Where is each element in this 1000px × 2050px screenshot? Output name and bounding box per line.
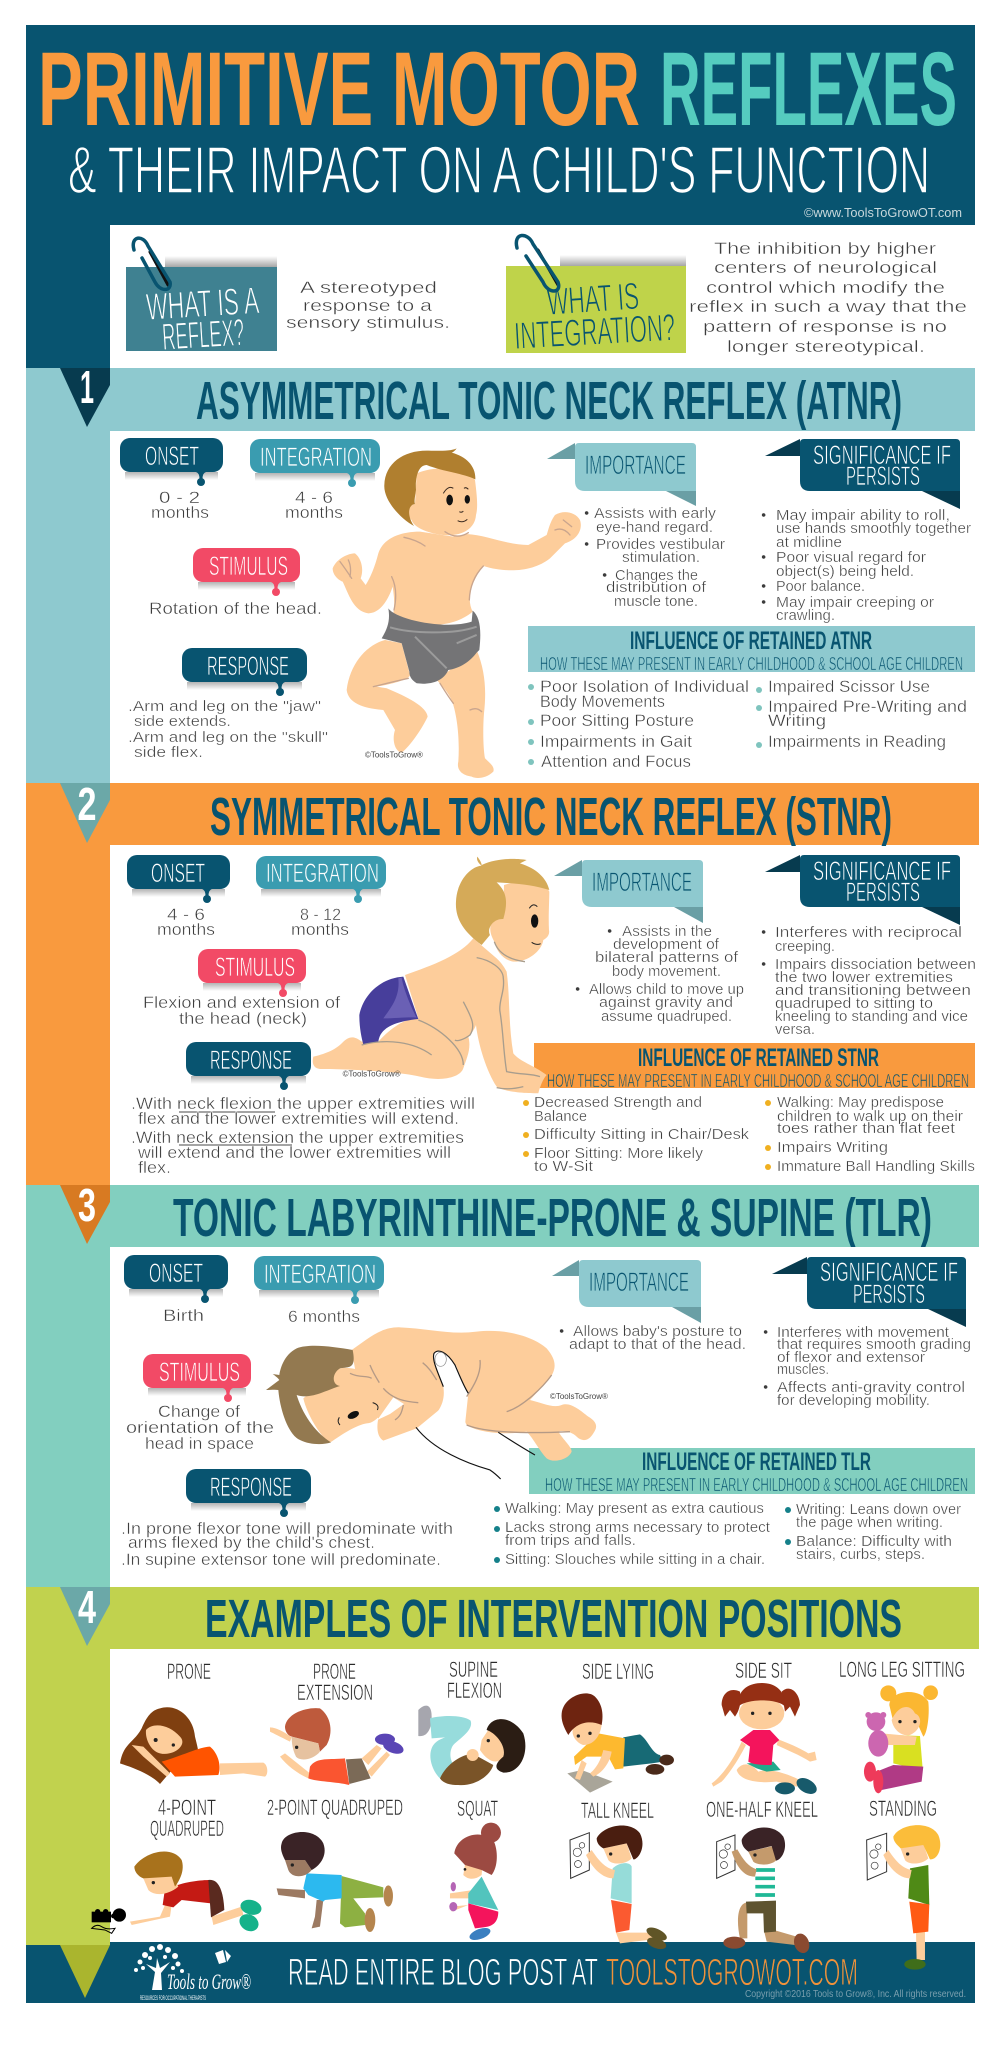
STNR influence list: children to walk up on their xyxy=(777,1108,963,1125)
definition: reflex: sensory stimulus. xyxy=(286,313,450,332)
ATNR influence list xyxy=(528,677,967,771)
position labels: TALL KNEEL xyxy=(581,1798,654,1823)
STNR response text: will extend and the lower extremities will xyxy=(137,1143,451,1162)
TLR stimulus tag: STIMULUS xyxy=(159,1357,240,1387)
STNR onset value: months xyxy=(157,920,215,939)
TLR stimulus tag xyxy=(143,1354,251,1402)
ATNR importance list: Changes the xyxy=(615,567,698,584)
STNR onset tag: ONSET xyxy=(151,858,205,888)
TLR importance ribbon xyxy=(552,1260,701,1323)
ATNR importance list: • xyxy=(584,505,589,522)
TLR influence list: from trips and falls. xyxy=(505,1532,636,1549)
STNR significance ribbon: PERSISTS xyxy=(846,877,920,907)
ATNR importance list: eye-hand regard. xyxy=(596,519,713,536)
ATNR response tag xyxy=(182,648,307,696)
STNR integration tag xyxy=(256,856,386,903)
STNR influence list: Floor Sitting: More likely xyxy=(534,1145,704,1162)
ATNR significance list: use hands smoothly together xyxy=(776,520,971,537)
STNR influence list: Decreased Strength and xyxy=(534,1094,702,1111)
STNR significance ribbon xyxy=(765,855,960,925)
ATNR significance list: May impair ability to roll, xyxy=(776,507,950,524)
ATNR importance list xyxy=(584,505,725,610)
note: what is a reflex: WHAT IS A xyxy=(145,280,261,329)
definition: integration xyxy=(689,239,967,356)
TLR significance list: of flexor and extensor xyxy=(777,1349,925,1366)
TLR significance list: Affects anti-gravity control xyxy=(777,1379,965,1396)
TLR influence list xyxy=(494,1500,961,1568)
section 3 band xyxy=(26,1179,979,1587)
STNR significance list xyxy=(761,924,976,1038)
position labels: EXTENSION xyxy=(297,1680,373,1705)
position labels: SQUAT xyxy=(457,1796,498,1821)
ATNR integration value: 4 - 6 xyxy=(295,488,333,507)
definition: reflex xyxy=(286,278,450,332)
STNR response tag xyxy=(186,1042,311,1090)
illustration: ATNR baby: ©ToolsToGrow® xyxy=(365,750,423,759)
TLR significance list xyxy=(763,1324,971,1409)
ATNR significance list: • xyxy=(761,507,766,524)
ATNR significance list: • xyxy=(761,594,766,611)
ATNR importance list: stimulation. xyxy=(622,549,700,566)
ATNR response text xyxy=(128,698,328,761)
TLR influence list: the page when writing. xyxy=(796,1514,943,1531)
ATNR influence list: Impairments in Gait xyxy=(540,732,692,751)
note: what is a reflex xyxy=(126,256,277,359)
illustrations: row one, right xyxy=(562,1683,938,1797)
ATNR stimulus tag xyxy=(193,548,300,596)
kid: prone xyxy=(120,1707,267,1784)
STNR onset tag xyxy=(127,855,230,903)
TLR importance list: adapt to that of the head. xyxy=(569,1336,746,1353)
position labels: PRONE xyxy=(313,1659,356,1684)
TLR integration tag xyxy=(254,1256,384,1304)
header banner xyxy=(26,25,975,368)
definition: integration: pattern of response is no xyxy=(703,317,947,336)
TLR significance list: muscles. xyxy=(777,1361,829,1378)
title: PRIMITIVE MOTOR xyxy=(38,31,640,148)
ATNR significance list: Poor balance. xyxy=(776,578,865,595)
STNR stimulus tag: STIMULUS xyxy=(215,952,295,982)
STNR significance list: creeping. xyxy=(775,938,835,955)
illustration: STNR baby: ©ToolsToGrow® xyxy=(343,1069,401,1078)
number marker xyxy=(60,361,110,427)
ATNR significance list: object(s) being held. xyxy=(776,563,914,580)
TLR importance list: Allows baby's posture to xyxy=(573,1323,742,1340)
ATNR significance list: crawling. xyxy=(776,607,835,624)
ATNR influence list: Impaired Scissor Use xyxy=(768,677,930,696)
STNR importance list: • xyxy=(607,923,612,940)
ATNR influence list: Impaired Pre-Writing and xyxy=(768,697,967,716)
STNR significance list: Interferes with reciprocal xyxy=(775,924,962,941)
definition: reflex: response to a xyxy=(303,296,433,315)
TLR influence list: Walking: May present as extra cautious xyxy=(505,1500,764,1517)
TLR response tag xyxy=(186,1469,311,1517)
STNR importance list: Assists in the xyxy=(622,923,712,940)
definition: reflex: A stereotyped xyxy=(300,278,437,297)
STNR significance list: quadruped to sitting to xyxy=(775,995,933,1012)
STNR stimulus text: the head (neck) xyxy=(179,1009,307,1028)
position labels: PRONE xyxy=(167,1659,211,1684)
copyright: Copyright ©2016 Tools to Grow®, Inc. All rights reserved. xyxy=(745,1989,966,2000)
TLR response text: arms flexed by the child's chest. xyxy=(128,1533,375,1552)
illustration: TLR baby: ©ToolsToGrow® xyxy=(550,1392,608,1401)
TLR importance ribbon: IMPORTANCE xyxy=(589,1267,689,1297)
illustrations: row one, left xyxy=(120,1706,525,1785)
illustration: TLR baby xyxy=(266,1327,608,1479)
ATNR significance list: • xyxy=(761,578,766,595)
kid: side lying xyxy=(562,1693,674,1793)
TLR significance list: for developing mobility. xyxy=(777,1392,930,1409)
STNR stimulus text: Flexion and extension of xyxy=(143,993,340,1012)
section 1 band xyxy=(26,361,975,783)
icon: paperclip xyxy=(133,238,170,290)
note: what is integration: WHAT IS xyxy=(546,276,640,324)
STNR response text: flex and the lower extremities will extend. xyxy=(138,1109,459,1128)
STNR response text: .With neck extension the upper extremities xyxy=(131,1128,464,1147)
ATNR significance ribbon xyxy=(765,439,960,509)
position labels: ONE-HALF KNEEL xyxy=(706,1797,818,1822)
STNR response text: .With neck flexion the upper extremities will xyxy=(131,1094,475,1113)
ATNR importance list: Assists with early xyxy=(594,505,717,522)
ATNR stimulus text: Rotation of the head. xyxy=(149,599,322,618)
kid: one-half kneel xyxy=(717,1827,812,1955)
TLR integration tag: INTEGRATION xyxy=(264,1259,376,1289)
ATNR response text: side extends. xyxy=(134,713,231,730)
ATNR influence list: Poor Sitting Posture xyxy=(540,711,694,730)
TLR influence list: Lacks strong arms necessary to protect xyxy=(505,1519,771,1536)
STNR significance list: • xyxy=(761,956,766,973)
note: what is integration xyxy=(506,255,686,358)
STNR significance list: and transitioning between xyxy=(775,982,971,999)
ATNR response text: side flex. xyxy=(134,744,203,761)
ATNR influence list: Impairments in Reading xyxy=(768,732,946,751)
ATNR integration value xyxy=(285,488,343,522)
ATNR significance list: at midline xyxy=(776,534,842,551)
STNR importance ribbon: IMPORTANCE xyxy=(592,867,692,897)
ATNR integration tag xyxy=(250,439,380,487)
ATNR response tag: RESPONSE xyxy=(207,651,289,681)
position labels: 4-POINT xyxy=(158,1795,216,1820)
number marker: 4 xyxy=(78,1581,96,1633)
number marker: 2 xyxy=(78,778,96,830)
TLR stimulus text: orientation of the xyxy=(126,1418,274,1437)
STNR importance list: bilateral patterns of xyxy=(595,949,739,966)
note: what is integration: INTEGRATION? xyxy=(513,307,676,358)
STNR influence list: to W-Sit xyxy=(534,1158,594,1175)
TLR significance list: that requires smooth grading xyxy=(777,1336,971,1353)
STNR influence list xyxy=(523,1094,975,1175)
STNR importance list: body movement. xyxy=(612,963,721,980)
number marker xyxy=(60,778,110,843)
position labels: SIDE SIT xyxy=(735,1658,792,1683)
ATNR influence list: Attention and Focus xyxy=(541,752,691,771)
STNR influence list: Balance xyxy=(534,1108,587,1125)
kid: side sit xyxy=(712,1683,819,1797)
logo xyxy=(134,1944,251,2002)
illustrations: row two, left xyxy=(92,1823,501,1942)
definition: integration: centers of neurological xyxy=(714,258,937,277)
TLR integration value: 6 months xyxy=(288,1307,360,1326)
TLR response tag: RESPONSE xyxy=(210,1472,292,1502)
section 4 band xyxy=(26,1581,979,1945)
note: what is a reflex: REFLEX? xyxy=(161,312,245,359)
STNR influence list: Impairs Writing xyxy=(777,1139,888,1156)
TLR significance list: Interferes with movement xyxy=(777,1324,950,1341)
TLR stimulus text: Change of xyxy=(158,1402,240,1421)
number marker xyxy=(60,1179,110,1244)
ATNR importance list: • xyxy=(602,567,607,584)
number marker: 1 xyxy=(80,361,94,413)
TLR stimulus text xyxy=(126,1402,274,1453)
ATNR onset tag xyxy=(120,438,223,486)
position labels: 2-POINT QUADRUPED xyxy=(267,1795,403,1820)
ATNR influence list: Body Movements xyxy=(540,692,665,711)
section 2 influence bar xyxy=(534,1043,975,1091)
STNR importance ribbon xyxy=(554,860,703,923)
definition: integration: reflex in such a way that the xyxy=(689,297,967,316)
STNR integration value xyxy=(291,905,349,939)
position labels: SIDE LYING xyxy=(582,1659,654,1684)
TLR onset value: Birth xyxy=(163,1306,204,1325)
icon: puzzle pieces xyxy=(92,1908,126,1933)
TLR significance ribbon xyxy=(772,1257,966,1327)
ATNR influence list: Poor Isolation of Individual xyxy=(540,677,749,696)
definition: integration: control which modify the xyxy=(706,278,945,297)
ATNR onset value: 0 - 2 xyxy=(159,488,200,507)
illustrations: row two, right xyxy=(570,1825,940,1970)
STNR integration value: 8 - 12 xyxy=(300,905,341,924)
TLR onset tag xyxy=(124,1255,228,1303)
section 2 band xyxy=(26,778,979,1185)
logo: RESOURCES FOR OCCUPATIONAL THERAPISTS xyxy=(140,1996,206,2002)
kid: tall kneel xyxy=(570,1825,669,1951)
kid: 2-point xyxy=(277,1832,393,1932)
TLR response text: .In prone flexor tone will predominate with xyxy=(121,1519,453,1538)
STNR importance list: assume quadruped. xyxy=(601,1008,732,1025)
STNR importance list: • xyxy=(575,981,580,998)
ATNR onset value xyxy=(151,488,209,522)
TLR importance list xyxy=(559,1323,746,1353)
STNR importance list: against gravity and xyxy=(599,994,733,1011)
STNR integration tag: INTEGRATION xyxy=(266,858,379,888)
section 3 influence bar xyxy=(529,1448,975,1495)
STNR influence list: Immature Ball Handling Skills xyxy=(777,1158,975,1175)
footer banner xyxy=(26,1942,975,2003)
ATNR importance list: muscle tone. xyxy=(614,593,698,610)
definition: integration: longer stereotypical. xyxy=(727,337,925,356)
TLR significance list: • xyxy=(763,1379,768,1396)
kid: 4-point xyxy=(130,1852,263,1935)
TLR onset tag: ONSET xyxy=(149,1258,203,1288)
TLR influence list: Writing: Leans down over xyxy=(796,1501,961,1518)
STNR significance list: Impairs dissociation between xyxy=(775,956,976,973)
TLR importance list: • xyxy=(559,1323,564,1340)
STNR response text: flex. xyxy=(138,1158,171,1177)
STNR significance list: versa. xyxy=(775,1021,815,1038)
TLR response text: .In supine extensor tone will predominate. xyxy=(121,1550,441,1569)
kid: prone extension xyxy=(270,1708,405,1785)
kid: standing xyxy=(867,1825,940,1970)
illustration: STNR baby xyxy=(313,857,549,1093)
ATNR onset tag: ONSET xyxy=(145,441,199,471)
number marker xyxy=(60,1581,110,1646)
STNR significance list: the two lower extremities xyxy=(775,969,953,986)
ATNR importance ribbon xyxy=(547,443,696,506)
definition: integration: The inhibition by higher xyxy=(714,239,936,258)
call to action: READ ENTIRE BLOG POST AT xyxy=(288,1952,598,1994)
STNR importance list: Allows child to move up xyxy=(589,981,744,998)
STNR importance list: development of xyxy=(613,936,720,953)
ATNR influence list: Writing xyxy=(768,711,826,730)
TLR response text xyxy=(121,1519,453,1569)
STNR stimulus tag xyxy=(198,949,306,997)
ATNR response text: .Arm and leg on the "jaw" xyxy=(128,698,321,715)
ATNR importance ribbon: IMPORTANCE xyxy=(585,450,686,480)
kid: squat xyxy=(449,1823,501,1942)
ATNR significance list: Poor visual regard for xyxy=(776,549,926,566)
ATNR importance list: Provides vestibular xyxy=(596,536,725,553)
STNR influence list: Walking: May predispose xyxy=(777,1094,944,1111)
ATNR onset value: months xyxy=(151,503,209,522)
TLR influence list: Balance: Difficulty with xyxy=(796,1533,952,1550)
kid: long leg sitting xyxy=(864,1685,938,1793)
illustration: ATNR baby xyxy=(333,448,581,778)
position labels: FLEXION xyxy=(447,1678,502,1703)
STNR significance list: kneeling to standing and vice xyxy=(775,1008,968,1025)
ATNR significance list: May impair creeping or xyxy=(776,594,934,611)
STNR influence list: toes rather than flat feet xyxy=(777,1120,956,1137)
ATNR integration tag: INTEGRATION xyxy=(260,442,372,472)
TLR significance ribbon: PERSISTS xyxy=(853,1279,925,1309)
STNR response text xyxy=(131,1094,475,1177)
position labels: STANDING xyxy=(869,1796,937,1821)
STNR onset value xyxy=(157,905,215,939)
kid: supine flexion xyxy=(418,1706,525,1785)
website credit: ©www.ToolsToGrowOT.com xyxy=(804,205,962,220)
panel: definitions xyxy=(126,235,967,359)
STNR integration value: months xyxy=(291,920,349,939)
icon: paperclip xyxy=(516,235,559,291)
STNR response tag: RESPONSE xyxy=(210,1045,292,1075)
TLR significance list: • xyxy=(763,1324,768,1341)
number marker: 3 xyxy=(78,1179,96,1231)
ATNR response text: .Arm and leg on the "skull" xyxy=(128,729,328,746)
STNR importance list xyxy=(575,923,744,1025)
STNR stimulus text xyxy=(143,993,340,1028)
STNR influence list: Difficulty Sitting in Chair/Desk xyxy=(534,1126,750,1143)
ATNR stimulus tag: STIMULUS xyxy=(209,551,288,581)
marker xyxy=(60,1945,110,1998)
position labels: SUPINE xyxy=(449,1657,498,1682)
ATNR significance ribbon: PERSISTS xyxy=(846,461,920,491)
STNR onset value: 4 - 6 xyxy=(167,905,205,924)
logo: Tools to Grow® xyxy=(167,1969,251,1994)
ATNR integration value: months xyxy=(285,503,343,522)
STNR significance list: • xyxy=(761,924,766,941)
TLR stimulus text: head in space xyxy=(145,1434,254,1453)
ATNR significance list: • xyxy=(761,549,766,566)
position labels xyxy=(150,1657,965,1841)
section 1 influence bar xyxy=(528,626,975,674)
position labels: QUADRUPED xyxy=(150,1816,224,1841)
TLR influence list: stairs, curbs, steps. xyxy=(796,1546,925,1563)
TLR influence list: Sitting: Slouches while sitting in a chair. xyxy=(505,1551,765,1568)
ATNR significance list xyxy=(761,507,971,624)
ATNR importance list: • xyxy=(584,536,589,553)
ATNR importance list: distribution of xyxy=(606,579,707,596)
